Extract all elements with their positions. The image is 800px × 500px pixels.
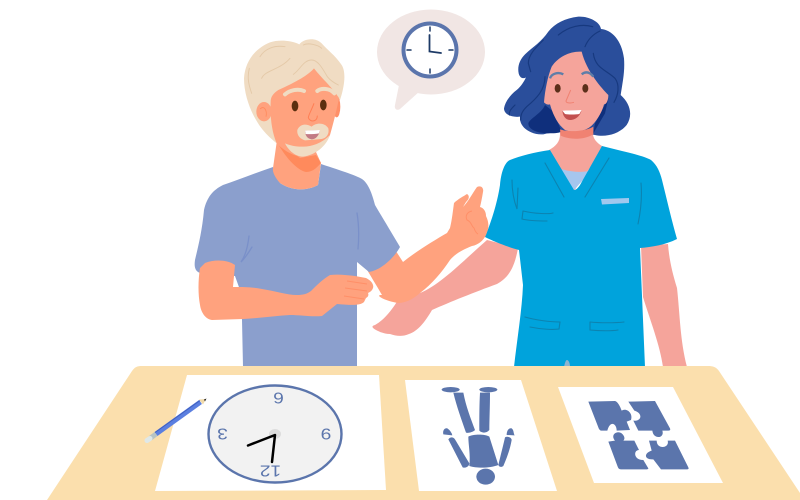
puzzle pieces <box>588 401 689 469</box>
body silhouette (upside down) <box>442 387 515 485</box>
nurse eyes <box>555 84 588 93</box>
worksheet: jigsaw puzzle <box>558 387 723 483</box>
nurse head <box>504 17 630 139</box>
nurse eyebrows <box>550 72 593 78</box>
worksheet: body figure <box>405 380 557 491</box>
man head <box>244 39 344 157</box>
nurse hair strands <box>509 25 618 120</box>
man face <box>271 68 339 157</box>
man shirt <box>195 164 400 367</box>
nurse arms <box>372 240 687 367</box>
man neck <box>273 140 321 189</box>
man left fingers <box>344 281 367 299</box>
man eyebrows <box>285 89 334 94</box>
man nose <box>308 103 317 121</box>
clock numbers (upside down): 9 <box>321 425 331 443</box>
clock numbers (upside down): 12 <box>260 462 281 480</box>
man finger lines <box>466 211 478 234</box>
worksheet: clock drawing <box>155 375 386 491</box>
nurse neck <box>549 120 604 191</box>
nurse scrub creases <box>512 158 641 331</box>
nurse hair shadow <box>528 98 608 133</box>
nurse badge <box>601 198 629 204</box>
man eyes <box>292 100 327 111</box>
man ears <box>256 96 340 121</box>
nurse hair <box>504 17 630 136</box>
clock numbers (upside down) <box>217 389 331 480</box>
nurse figure <box>372 17 687 367</box>
man shirt creases <box>241 213 359 262</box>
scrub centre slit <box>564 360 570 367</box>
nurse neck shadow <box>560 127 593 139</box>
man mouth <box>305 130 320 139</box>
man figure <box>195 39 488 367</box>
speech bubble <box>377 10 485 110</box>
man left arm <box>198 261 373 320</box>
nurse mouth <box>562 110 582 120</box>
clock hands <box>248 435 275 462</box>
nurse scrubs <box>485 146 677 367</box>
man hair <box>244 39 344 143</box>
clock face <box>208 386 342 482</box>
man right arm <box>366 186 488 303</box>
man beard <box>285 124 330 157</box>
man neck shadow <box>277 142 321 172</box>
icon: pencil <box>147 398 206 440</box>
nurse face <box>544 52 608 132</box>
clock numbers (upside down): 6 <box>273 389 284 407</box>
man hair strands <box>248 44 338 93</box>
nurse undershirt <box>555 166 592 190</box>
table <box>47 366 800 500</box>
clock numbers (upside down): 3 <box>217 425 228 443</box>
nurse nose <box>566 90 574 103</box>
icon: clock in bubble <box>402 22 458 78</box>
